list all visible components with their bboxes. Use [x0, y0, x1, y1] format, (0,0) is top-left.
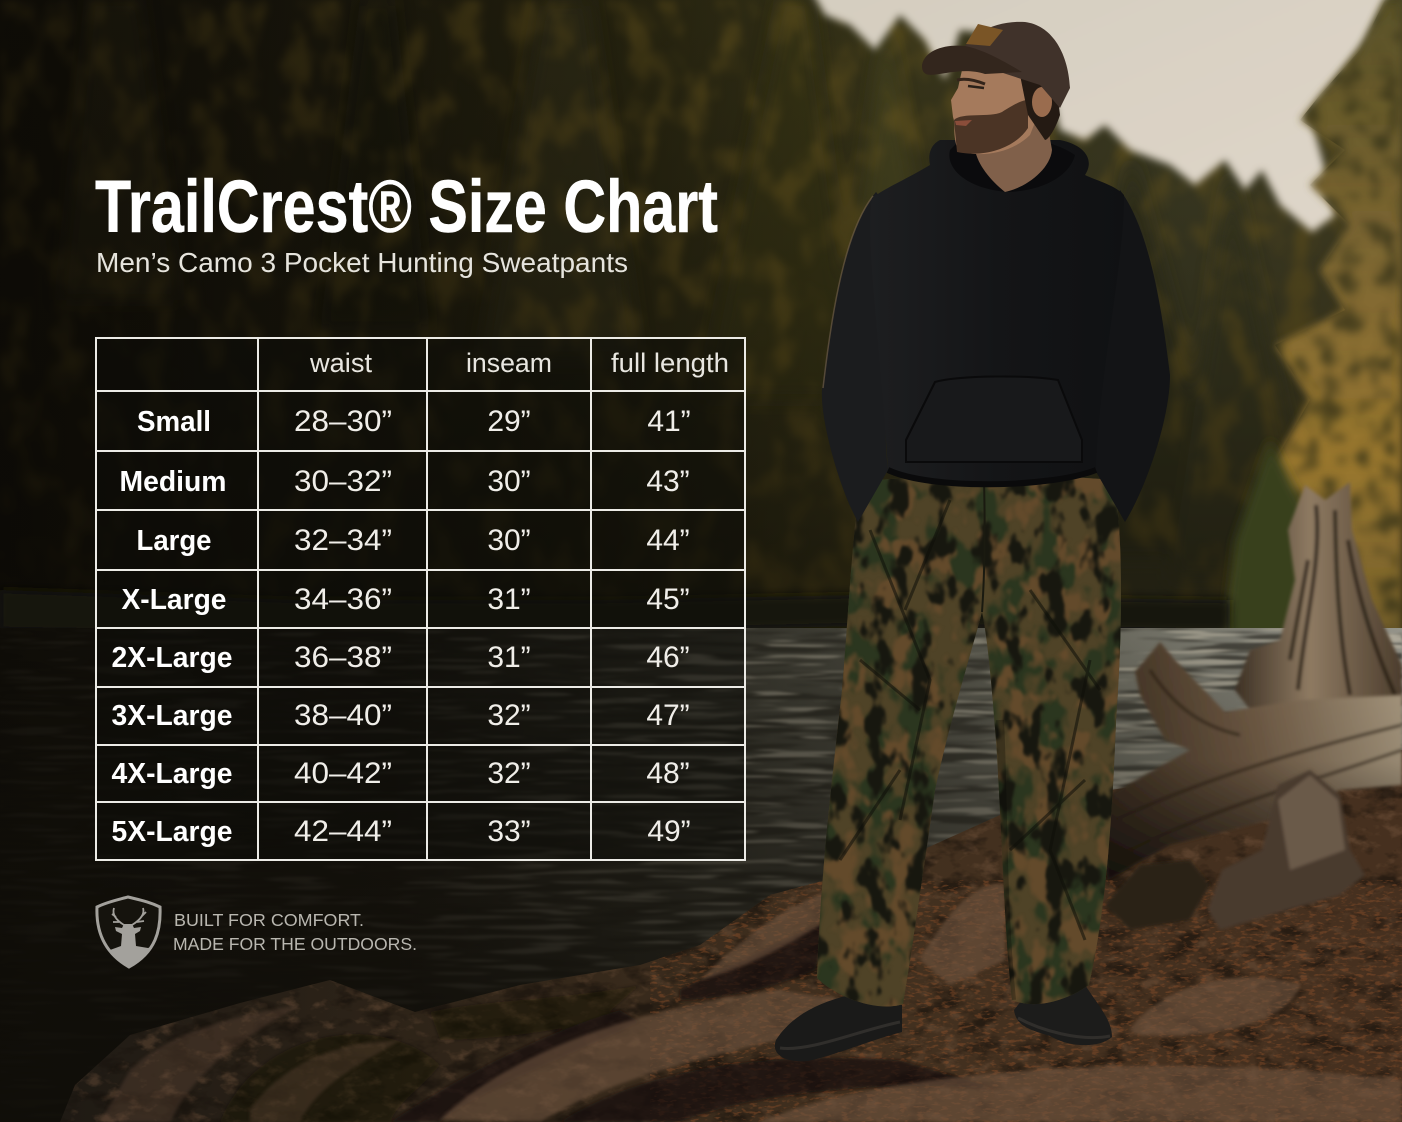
inseam values: 32” — [487, 757, 531, 790]
full length values: 46” — [646, 641, 690, 674]
background: forest — [0, 0, 1402, 660]
inseam values: 30” — [487, 465, 531, 498]
size labels: Large — [136, 525, 212, 557]
size labels: 3X-Large — [112, 700, 232, 732]
dark green tree at river bend — [1222, 440, 1310, 650]
sky — [800, 0, 1400, 232]
waist values: 32–34” — [294, 524, 392, 557]
camo twigs — [840, 500, 1100, 940]
right sleeve — [1090, 190, 1170, 522]
right shoe — [1014, 985, 1112, 1045]
foreground boulders — [1105, 770, 1365, 930]
tagline: MADE FOR THE OUTDOORS. — [173, 934, 417, 954]
inseam values: 32” — [487, 699, 531, 732]
column headers: inseam — [466, 348, 552, 378]
left shoe — [775, 995, 902, 1061]
shoreline rocks and forest floor — [0, 750, 1402, 1122]
waist values: 34–36” — [294, 583, 392, 616]
full length values: 47” — [646, 699, 690, 732]
waist values: 38–40” — [294, 699, 392, 732]
full length values: 45” — [646, 583, 690, 616]
waist values — [294, 405, 392, 848]
inseam values: 29” — [487, 405, 531, 438]
full length values: 48” — [646, 757, 690, 790]
size labels: X-Large — [122, 584, 226, 616]
pine shadow texture — [1276, 4, 1402, 628]
icon: deer shield logo — [96, 897, 162, 970]
full length values — [646, 405, 691, 848]
cap — [922, 22, 1070, 108]
waist values: 28–30” — [294, 405, 392, 438]
hood opening — [949, 140, 1075, 192]
size labels: Medium — [120, 466, 226, 498]
neck — [975, 110, 1052, 192]
kangaroo pocket — [906, 376, 1082, 462]
size labels: 5X-Large — [112, 816, 232, 848]
size chart table — [96, 338, 745, 860]
title: TrailCrest® Size Chart — [95, 165, 718, 248]
rock shadows — [220, 920, 1000, 1122]
far shoreline — [0, 590, 1230, 636]
man — [775, 22, 1170, 1061]
camo pants — [817, 478, 1121, 1006]
inseam values — [487, 405, 531, 848]
table grid — [96, 338, 745, 860]
size labels: Small — [137, 406, 211, 438]
full length values: 41” — [647, 405, 691, 438]
full length values: 44” — [646, 524, 690, 557]
foliage mottling — [0, 0, 1402, 620]
inseam values: 30” — [487, 524, 531, 557]
background tree silhouettes — [60, 0, 1320, 580]
waist values: 30–32” — [294, 465, 392, 498]
hoodie body — [870, 140, 1124, 486]
full length values: 49” — [647, 815, 691, 848]
waist values: 40–42” — [294, 757, 392, 790]
tagline — [173, 910, 417, 954]
column headers: waist — [309, 348, 373, 378]
size labels: 2X-Large — [112, 642, 232, 674]
subtitle: Men’s Camo 3 Pocket Hunting Sweatpants — [96, 247, 628, 278]
driftwood log — [1100, 642, 1402, 880]
inseam values: 31” — [487, 583, 531, 616]
water — [43, 628, 1402, 1002]
right-hand sunlit pine — [1225, 0, 1402, 660]
inseam values: 31” — [487, 641, 531, 674]
size labels — [112, 406, 232, 848]
inseam values: 33” — [487, 815, 531, 848]
waist values: 42–44” — [294, 815, 392, 848]
column headers — [309, 348, 729, 378]
face — [951, 65, 1060, 154]
left darkening — [0, 0, 900, 660]
sunlit rock tops — [100, 884, 1402, 1122]
driftwood stump — [1235, 482, 1402, 710]
waist values: 36–38” — [294, 641, 392, 674]
size labels: 4X-Large — [112, 758, 232, 790]
tagline: BUILT FOR COMFORT. — [174, 910, 364, 930]
left sleeve — [822, 192, 902, 522]
full length values: 43” — [646, 465, 690, 498]
column headers: full length — [611, 348, 729, 378]
